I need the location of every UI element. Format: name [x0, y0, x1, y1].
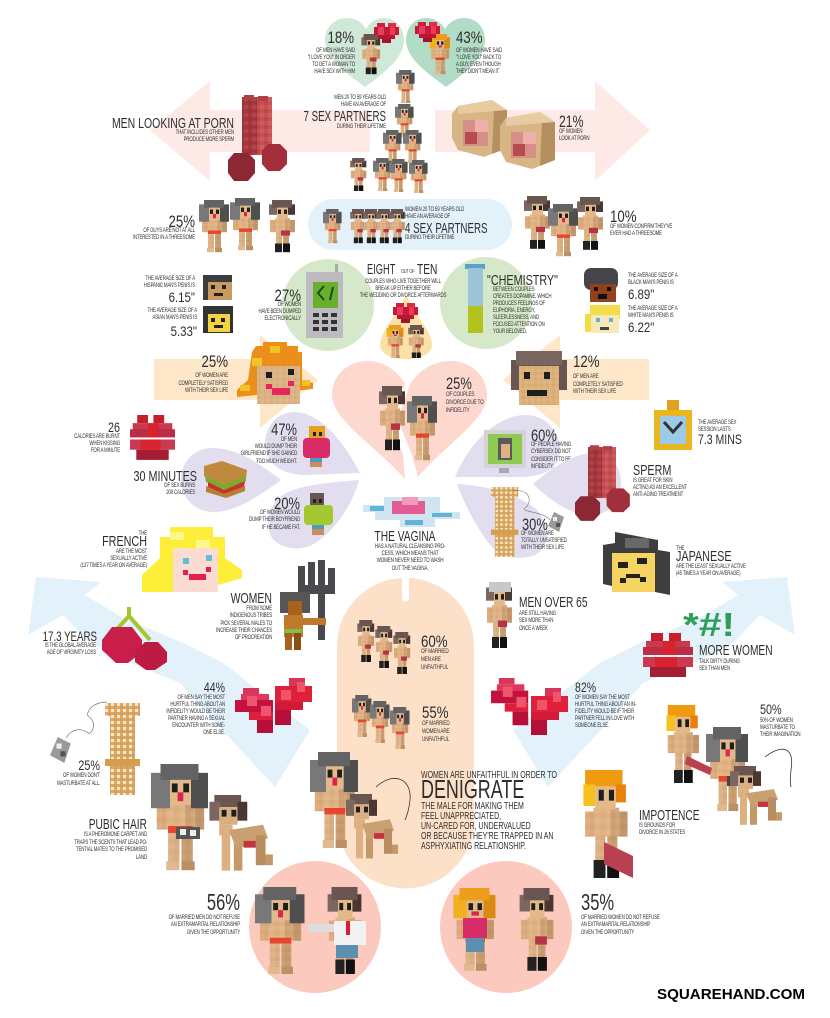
text: WOMEN 20 TO 59 YEARS OLD — [405, 206, 464, 213]
panel: pubic hair — [74, 764, 273, 871]
panel: white man size — [585, 305, 678, 335]
panel: 7 sex partners — [304, 70, 428, 193]
panel: 43 percent of women — [406, 18, 502, 87]
panel: 43 percent of women: THEY DIDN'T MEAN IT — [456, 68, 500, 75]
panel: the french: FRENCH — [102, 532, 147, 549]
right pink arrow — [435, 81, 650, 181]
panel: 10 percent threesome: OF WOMEN CONFIRM THEY'VE — [610, 223, 673, 230]
figures — [323, 209, 405, 243]
icon: broken heart — [235, 678, 312, 733]
panel: men looking at porn: THAT INCLUDES OTHER MEN — [176, 129, 234, 136]
panel: sperm — [533, 445, 688, 521]
panel: chemistry: SLEEPLESSNESS, AND — [493, 314, 539, 321]
figures: couple — [387, 325, 424, 358]
heading: EIGHT — [367, 261, 396, 278]
panel: eight out of ten: OUT OF — [401, 268, 415, 275]
panel: women satisfied: COMPLETELY SATISFIED — [178, 380, 228, 387]
panel: white man size: 6.22" — [628, 320, 654, 335]
icon: textured column — [491, 487, 518, 557]
panel: the vagina: CESS, WHICH MEANS THAT — [382, 550, 439, 557]
panel: 55 percent women — [352, 695, 450, 749]
panel: 60 percent men: OF MARRIED — [421, 648, 449, 655]
icon: mouse — [512, 490, 564, 532]
panel: 4 sex partners: HAVE AN AVERAGE OF — [405, 213, 451, 220]
panel: cybersex — [455, 415, 572, 477]
panel: the french: (137 TIMES A YEAR ON AVERAGE) — [80, 562, 147, 569]
panel: denigrate: OR BECAUSE THEY'RE TRAPPED IN AN — [421, 830, 553, 841]
stat: 43% — [456, 29, 483, 47]
panel: 44 percent infidelity — [166, 678, 312, 736]
panel: 10 percent threesome: EVER HAD A THREESOME — [610, 230, 662, 237]
panel: session length — [654, 400, 742, 450]
panel: cybersex: INFIDELITY. — [531, 463, 554, 470]
panel: 56 percent: GIVEN THE OPPORTUNITY — [187, 929, 240, 936]
icon: heart — [374, 23, 399, 43]
panel: women looking at porn: OF WOMEN — [559, 128, 583, 135]
panel: men looking at porn — [112, 95, 287, 181]
panel: denigrate: DENIGRATE — [421, 775, 524, 804]
panel: men over 65: ARE STILL HAVING — [519, 610, 556, 617]
panel: 25 percent do not — [50, 702, 140, 795]
panel: women looking at porn — [452, 100, 590, 169]
panel: 7 sex partners: 7 SEX PARTNERS — [304, 108, 386, 125]
panel: more women: MORE WOMEN — [699, 641, 773, 659]
panel: hispanic size: 6.15" — [169, 290, 195, 305]
panel: the vagina: WOMEN NEVER NEED TO WASH — [377, 557, 444, 564]
panel: pubic hair: TENTIAL MATES TO THE PROMISED — [76, 846, 147, 853]
panel: 10 percent threesome — [524, 196, 673, 256]
panel: the vagina: HAS A NATURAL CLEANSING PRO- — [375, 543, 445, 550]
panel: 4 sex partners — [308, 199, 512, 250]
panel: chemistry: EUPHORIA, ENERGY, — [493, 307, 535, 314]
panel: chemistry — [440, 257, 558, 349]
panel: white man size: THE AVERAGE SIZE OF A — [628, 305, 678, 312]
panel: virginity age: 17.3 YEARS — [43, 630, 97, 644]
panel: indigenous tribes: WOMEN — [231, 589, 272, 606]
panel: 7 sex partners: MEN 20 TO 59 YEARS OLD — [334, 94, 386, 101]
panel: the japanese — [603, 532, 746, 595]
panel: 56 percent: AN EXTRAMARITAL RELATIONSHIP — [171, 921, 240, 928]
panel: men satisfied — [511, 351, 623, 405]
panel: 30 minutes: OF SEX BURNS — [164, 482, 195, 489]
panel: divorce heart: INFIDELITY — [446, 407, 470, 414]
panel: sperm: ACTING AS AN EXCELLENT — [633, 484, 688, 491]
panel: 18 percent of men — [308, 18, 404, 87]
panel: 25 percent do not: OF WOMEN DON'T — [63, 772, 101, 779]
panel: 43 percent of women: OF WOMEN HAVE SAID — [456, 47, 502, 54]
panel: 30 percent unsatisfied: OF WOMEN ARE — [521, 530, 554, 537]
panel: 50 percent imagination: 50% OF WOMEN — [760, 717, 793, 724]
panel: the vagina — [363, 497, 460, 572]
panel: indigenous tribes: PICK SEVERAL MALES TO — [220, 620, 273, 627]
panel: 50 percent imagination — [666, 702, 801, 825]
panel: 18 percent of men: TO GET A WOMAN TO — [312, 61, 356, 68]
panel: denigrate: UN-CARED FOR, UNDERVALUED — [421, 820, 531, 831]
stat: 26 — [108, 420, 120, 435]
panel: women looking at porn: LOOK AT PORN — [559, 135, 590, 142]
stat: 27% — [274, 287, 301, 305]
panel: 47 percent men — [241, 412, 360, 475]
panel: 55 percent women: UNFAITHFUL — [422, 736, 449, 743]
panel: impotence: IMPOTENCE — [639, 806, 700, 824]
panel: 82 percent infidelity: FIDELITY WOULD BE IF THEIR — [575, 708, 634, 715]
panel: the french: THE — [139, 530, 147, 537]
panel: 47 percent men: GIRLFRIEND IF SHE GAINED — [241, 450, 297, 457]
panel: 44 percent infidelity: ENCOUNTER WITH SOME- — [172, 722, 225, 729]
panel: eight out of ten: TEN — [417, 260, 437, 278]
panel: divorce heart: DIVORCE DUE TO — [446, 399, 484, 406]
panel: 44 percent infidelity: ONE ELSE. — [203, 729, 226, 736]
panel: cybersex: OF PEOPLE HAVING — [531, 441, 571, 448]
panel: hispanic size: HISPANIC MAN'S PENIS IS — [144, 282, 195, 289]
panel: cybersex: CONSIDER IT TO BE — [531, 456, 571, 463]
panel: white man size: WHITE MAN'S PENIS IS — [628, 312, 674, 319]
panel: chemistry: BETWEEN COUPLES — [493, 286, 535, 293]
heading: "CHEMISTRY" — [487, 271, 558, 288]
panel: 47 percent men: TOO MUCH WEIGHT. — [256, 458, 298, 465]
panel: sperm: IS GREAT FOR SKIN — [633, 477, 673, 484]
panel: hispanic size: THE AVERAGE SIZE OF A — [145, 275, 195, 282]
panel: 35 percent: AN EXTRAMARITAL RELATIONSHIP — [581, 921, 651, 928]
panel: kissing calories — [74, 415, 175, 460]
panel: 55 percent women: OF MARRIED — [422, 720, 450, 727]
stat: 10% — [610, 208, 637, 226]
icon: clock — [654, 400, 692, 450]
panel: kissing calories: WHEN KISSING — [89, 440, 120, 447]
panel: 82 percent infidelity: SOMEONE ELSE. — [575, 722, 610, 729]
figures — [310, 752, 410, 858]
brand credit: SQUAREHAND.COM — [657, 986, 805, 1003]
panel: men over 65: ONCE A WEEK — [519, 625, 548, 632]
panel: women satisfied — [178, 342, 313, 404]
panel: asian size: THE AVERAGE SIZE OF A — [147, 307, 197, 314]
panel: more women — [643, 606, 773, 677]
panel: impotence: IS GROUNDS FOR — [639, 822, 675, 829]
panel: indigenous tribes: INCREASE THEIR CHANCES — [216, 627, 272, 634]
panel: kissing calories: FOR A MINUTE — [91, 447, 120, 454]
panel: sperm: ANTI-AGING TREATMENT — [633, 491, 684, 498]
panel: 60 percent men — [357, 620, 449, 674]
panel: 20 percent women: IF HE BECAME FAT. — [262, 524, 301, 531]
panel: men satisfied: OF MEN ARE — [573, 373, 599, 380]
text: 30 MINUTES — [133, 467, 197, 484]
stat: 20% — [274, 494, 300, 514]
stat: 55% — [422, 704, 449, 722]
panel: women satisfied: WITH THEIR SEX LIFE — [185, 387, 228, 394]
panel: centre peach pill — [337, 578, 474, 888]
panel: more women: SEX THAN MEN — [699, 665, 730, 672]
panel: black man size — [584, 268, 678, 302]
panel: black man size: 6.89" — [628, 287, 654, 302]
icon: heart — [415, 22, 440, 42]
panel: 60 percent men: MEN ARE — [421, 656, 441, 663]
icon: woman — [430, 34, 450, 74]
panel: dumped electronically — [258, 259, 374, 351]
panel: men looking at porn: PRODUCE MORE SPERM — [184, 136, 234, 143]
panel: men satisfied: COMPLETELY SATISFIED — [573, 381, 623, 388]
panel: session length: 7.3 MINS — [698, 432, 742, 447]
panel: chemistry: CREATES DOPAMINE, WHICH — [493, 293, 552, 300]
panel: 4 sex partners: DURING THEIR LIFETIME — [405, 234, 455, 241]
panel: 20 percent women — [249, 480, 359, 549]
panel: the japanese: THE — [676, 545, 685, 552]
panel: 44 percent infidelity: HURTFUL THING ABOUT AN — [170, 701, 225, 708]
panel: 4 sex partners: 4 SEX PARTNERS — [405, 220, 487, 237]
stat: 18% — [327, 29, 354, 47]
stat: 25% — [446, 374, 472, 394]
icon: figure — [304, 493, 333, 535]
panel: 82 percent infidelity: 82% — [575, 680, 596, 695]
panel: asian size — [147, 306, 233, 339]
panel: 25 percent do not: 25% — [78, 758, 100, 773]
stat: 25% — [168, 213, 195, 231]
panel: 47 percent men: OF MEN — [281, 436, 297, 443]
stat: 30% — [522, 515, 548, 535]
panel: 35 percent: 35% — [581, 890, 614, 916]
left pink arrow — [150, 81, 370, 181]
panel: 43 percent of women: A GUY, EVEN THOUGH — [456, 61, 501, 68]
panel: pubic hair: PUBIC HAIR — [89, 815, 147, 833]
stat: 47% — [271, 420, 297, 440]
panel: 30 percent unsatisfied: WITH THEIR SEX LIFE — [521, 544, 564, 551]
heading: SPERM — [633, 461, 671, 478]
panel: dumped electronically: OF WOMEN — [278, 301, 301, 308]
icon: lips — [643, 633, 693, 677]
icon: broken heart — [491, 678, 568, 735]
text: THE AVERAGE SEX — [698, 419, 737, 426]
panel: 30 minutes: 200 CALORIES — [166, 489, 195, 496]
panel: chemistry: PRODUCES FEELINGS OF — [493, 300, 546, 307]
panel: virginity age: IS THE GLOBAL AVERAGE — [45, 642, 96, 649]
panel: virginity age — [43, 607, 167, 670]
icon: test tube — [465, 264, 485, 333]
figures — [454, 888, 553, 971]
left blue arrow — [28, 577, 310, 787]
panel: impotence: DIVORCE IN 26 STATES — [639, 829, 686, 836]
panel: indigenous tribes: OF PROCREATION — [235, 634, 272, 641]
icon: figure — [303, 426, 330, 467]
panel: men over 65 — [486, 582, 588, 648]
panel: 30 percent unsatisfied: TOTALLY UNSATISFIED — [521, 537, 567, 544]
panel: pubic hair: LAND — [136, 854, 147, 861]
panel: more women: TALK DIRTY DURING — [699, 658, 740, 665]
stat: 21% — [559, 113, 583, 132]
panel: women satisfied: OF WOMEN ARE — [195, 372, 228, 379]
icon: sandwich — [204, 461, 247, 498]
panel: 20 percent women: OF WOMEN WOULD — [260, 509, 300, 516]
panel: denigrate: THE MALE FOR MAKING THEM — [421, 800, 524, 811]
figures — [151, 764, 273, 871]
panel: men satisfied: WITH THEIR SEX LIFE — [573, 388, 616, 395]
panel: chemistry: FOCUSED ATTENTION ON — [493, 321, 545, 328]
panel: pubic hair: TRAPS THE SCENTS THAT LEAD PO- — [74, 839, 147, 846]
panel: the vagina: OUT THE VAGINA. — [392, 565, 429, 572]
panel: 55 percent women: WOMEN ARE — [422, 728, 450, 735]
figures: couple — [379, 386, 437, 460]
panel: the japanese: (45 TIMES A YEAR ON AVERAGE) — [676, 570, 741, 577]
icon: woman face — [237, 342, 313, 404]
panel: 30 minutes — [133, 448, 281, 512]
icon: block pattern — [363, 497, 460, 527]
panel: 44 percent infidelity: OF MEN SAY THE MOST — [177, 694, 226, 701]
icon: cherries — [102, 607, 167, 670]
panel: 18 percent of men: "I LOVE YOU" IN ORDER — [308, 54, 355, 61]
panel: 47 percent men: WOULD DUMP THEIR — [255, 443, 297, 450]
panel: cybersex: CYBERSEX DO NOT — [531, 448, 572, 455]
panel: virginity age: AGE OF VIRGINITY LOSS — [47, 649, 96, 656]
panel: the french — [80, 527, 242, 592]
panel: men over 65: SEX MORE THAN — [519, 617, 553, 624]
figures — [255, 887, 366, 974]
panel: 50 percent imagination: MASTURBATE TO — [760, 724, 796, 731]
panel: denigrate: WOMEN ARE UNFAITHFUL IN ORDER TO — [421, 769, 557, 780]
stat: 60% — [531, 426, 557, 446]
panel: denigrate: FEEL UNAPPRECIATED, — [421, 810, 501, 821]
panel: kissing calories: CALORIES ARE BURNT — [74, 433, 121, 440]
panel: 30 percent unsatisfied — [457, 484, 567, 558]
icon: monitor — [484, 430, 526, 473]
panel: pubic hair: IS A PHEROMONE CARPET AND — [84, 831, 147, 838]
panel: the french: SEXUALLY ACTIVE — [110, 555, 147, 562]
panel: 43 percent of women: "I LOVE YOU" BACK TO — [456, 54, 502, 61]
panel: 25 percent threesome: OF GUYS ARE NOT AT ALL — [143, 227, 195, 234]
panel: 18 percent of men: OF MEN HAVE SAID — [316, 47, 355, 54]
panel: indigenous tribes — [216, 560, 335, 650]
panel: eight out of ten: COUPLES WHO LIVE TOGETHER WILL — [365, 278, 441, 285]
panel: hispanic size — [144, 275, 232, 305]
panel: black man size: THE AVERAGE SIZE OF A — [628, 272, 678, 279]
icon: broken heart — [393, 303, 418, 323]
stat: 12% — [573, 353, 600, 371]
figures — [666, 705, 792, 825]
right cream arrow — [503, 335, 649, 428]
panel: impotence — [583, 770, 700, 878]
icon: man face — [511, 351, 567, 405]
panel: men over 65: MEN OVER 65 — [519, 593, 588, 611]
panel: 25 percent threesome — [133, 198, 295, 252]
panel: 7 sex partners: DURING THEIR LIFETIME — [337, 123, 386, 130]
panel: the japanese: ARE THE LEAST SEXUALLY ACTIVE — [676, 563, 746, 570]
panel: 35 percent: GIVEN THE OPPORTUNITY — [581, 929, 635, 936]
icon: trident — [298, 560, 335, 640]
panel: 25 percent do not: MASTURBATE AT ALL. — [57, 780, 101, 787]
panel: dumped electronically: HAVE BEEN DUMPED — [258, 308, 301, 315]
panel: 82 percent infidelity: PARTNER FELL IN LOVE WITH — [575, 715, 634, 722]
left cream arrow — [154, 335, 318, 428]
panel: 20 percent women: DUMP THEIR BOYFRIEND — [249, 516, 300, 523]
panel: 50 percent imagination: 50% — [760, 702, 782, 717]
panel: 50 percent imagination: THEIR IMAGINATION — [760, 731, 801, 738]
icon: figure — [280, 592, 326, 650]
panel: 56 percent — [169, 861, 381, 993]
panel: dumped electronically: ELECTRONICALLY — [264, 315, 301, 322]
panel: indigenous tribes: FROM SOME — [246, 605, 272, 612]
panel: the japanese: JAPANESE — [676, 547, 732, 564]
icon: swearing symbols: *#! — [683, 606, 735, 643]
panel: 25 percent threesome: INTERESTED IN A THREESOME — [133, 234, 195, 241]
figures: pyramid — [350, 70, 428, 193]
icon: mouse with cord — [50, 702, 107, 763]
panel: asian size: 5.33" — [171, 324, 197, 339]
panel: divorce heart: OF COUPLES — [446, 391, 475, 398]
panel: 35 percent: OF MARRIED WOMEN DO NOT REFUSE — [581, 914, 660, 921]
panel: 7 sex partners: HAVE AN AVERAGE OF — [341, 101, 387, 108]
panel: black man size: BLACK MAN'S PENIS IS — [628, 279, 674, 286]
heading: MEN LOOKING AT PORN — [112, 114, 234, 131]
panel: eight out of ten: BREAK UP EITHER BEFORE — [375, 285, 431, 292]
icon: blonde face — [142, 527, 242, 592]
icon: face — [603, 532, 670, 595]
icon: man — [361, 34, 380, 74]
panel: denigrate: ASPHYXIATING RELATIONSHIP. — [421, 840, 526, 851]
stat: 25% — [201, 353, 228, 371]
stat: 60% — [421, 633, 448, 651]
panel: 18 percent of men: HAVE SEX WITH HIM — [314, 68, 355, 75]
panel: 82 percent infidelity — [491, 678, 636, 735]
panel: session length: SESSION LASTS — [698, 426, 731, 433]
panel: 60 percent men: UNFAITHFUL — [421, 664, 448, 671]
panel: 82 percent infidelity: HURTFUL THING ABOUT AN IN- — [575, 701, 636, 708]
panel: the french: ARE THE MOST — [116, 548, 148, 555]
panel: eight out of ten — [360, 260, 447, 359]
right blue arrow — [513, 577, 795, 787]
panel: 82 percent infidelity: OF WOMEN SAY THE MOST — [575, 694, 630, 701]
panel: denigrate — [310, 752, 557, 858]
panel: 44 percent infidelity: INFIDELITY WOULD BE THEIR — [166, 708, 225, 715]
panel: 56 percent: 56% — [207, 890, 240, 916]
panel: 44 percent infidelity: 44% — [204, 680, 225, 695]
panel: 35 percent — [440, 861, 660, 993]
panel: 44 percent infidelity: PARTNER HAVING A SEXUAL — [168, 715, 225, 722]
panel: chemistry: YOUR BELOVED. — [493, 328, 527, 335]
heading: THE VAGINA — [375, 527, 436, 545]
panel: divorce heart — [332, 361, 487, 479]
panel: asian size: ASIAN MAN'S PENIS IS — [152, 314, 197, 321]
panel: 56 percent: OF MARRIED MEN DO NOT REFUSE — [169, 914, 240, 921]
panel: indigenous tribes: INDIGENOUS TRIBES — [230, 612, 272, 619]
panel: eight out of ten: THE WEDDING OR DIVORCE AFTERWARDS — [360, 292, 447, 299]
icon: phone — [306, 264, 343, 338]
